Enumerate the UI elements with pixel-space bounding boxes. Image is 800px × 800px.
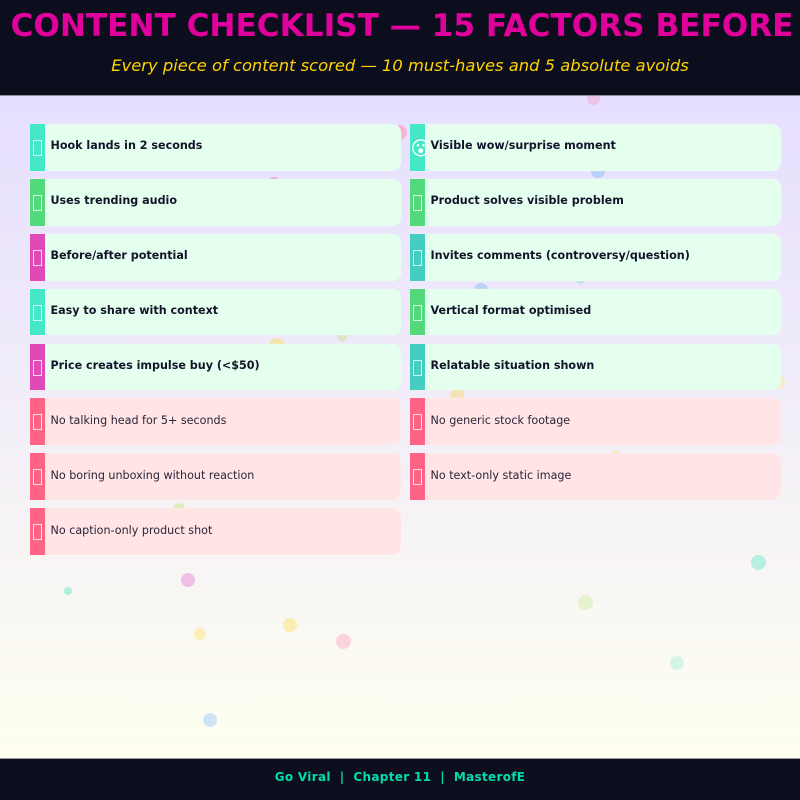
item: no talking head <box>30 398 401 445</box>
item: no caption-only: No caption-only product shot <box>50 524 212 537</box>
item: vertical: Vertical format optimised <box>430 304 591 317</box>
item: audio: Uses trending audio <box>50 194 177 207</box>
item: wow: 😮 <box>410 137 431 160</box>
item: before/after: Before/after potential <box>50 249 188 262</box>
item: audio <box>30 179 401 226</box>
item: comments: Invites comments (controversy/question) <box>430 249 690 262</box>
item: before/after <box>30 234 401 281</box>
item: relatable <box>410 344 781 390</box>
item: wow <box>410 124 781 171</box>
item: no static image <box>410 453 781 500</box>
item: no unboxing: No boring unboxing without reaction <box>50 469 254 482</box>
item: vertical <box>410 289 781 335</box>
subtitle: Every piece of content scored — 10 must-haves and 5 absolute avoids <box>111 56 689 75</box>
item: hook: Hook lands in 2 seconds <box>50 139 202 152</box>
item: no stock footage: No generic stock footage <box>430 414 570 427</box>
item: no talking head: No talking head for 5+ seconds <box>50 414 226 427</box>
item: problem <box>410 179 781 226</box>
item: no unboxing <box>30 453 401 500</box>
item: relatable: Relatable situation shown <box>430 358 594 372</box>
item: problem: Product solves visible problem <box>430 194 624 207</box>
item: wow: Visible wow/surprise moment <box>430 139 616 152</box>
item: price <box>30 344 401 390</box>
item: no caption-only <box>30 508 401 555</box>
item: comments <box>410 234 781 281</box>
item: no stock footage <box>410 398 781 445</box>
item: share <box>30 289 401 335</box>
title: CONTENT CHECKLIST — 15 FACTORS BEFORE <box>11 8 793 44</box>
item: share: Easy to share with context <box>50 304 218 317</box>
header band <box>0 0 800 96</box>
item: price: Price creates impulse buy (<$50) <box>50 358 260 372</box>
item: no static image: No text-only static image <box>430 469 571 482</box>
footer: Go Viral | Chapter 11 | MasterofE <box>275 770 525 784</box>
item: hook <box>30 124 401 171</box>
footer <box>0 758 800 800</box>
